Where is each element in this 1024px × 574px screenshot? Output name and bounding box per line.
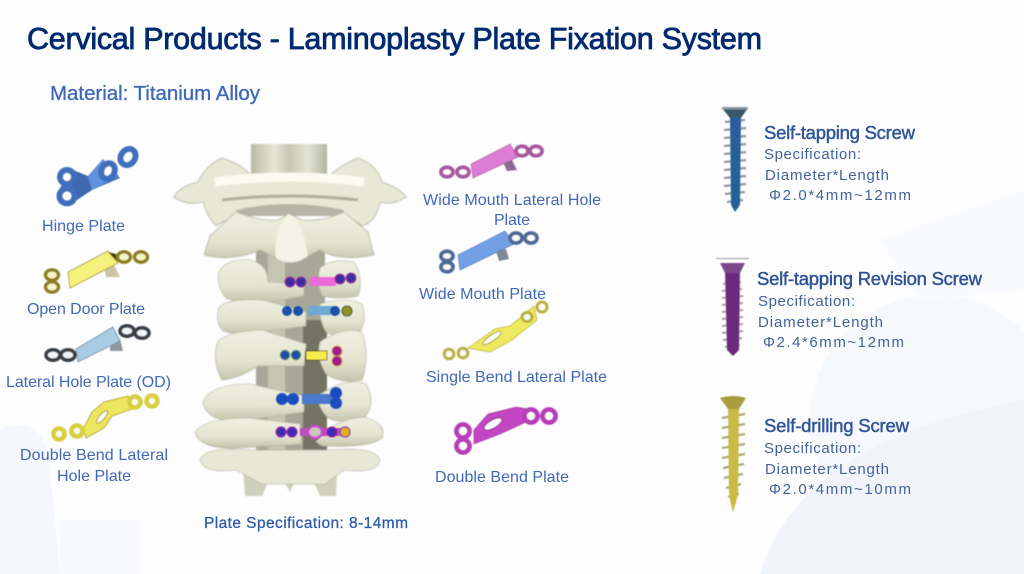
implanted yellow plate	[280, 346, 342, 366]
text: self-tapping screw	[764, 122, 916, 204]
material heading: Material: Titanium Alloy	[50, 82, 261, 105]
self-tapping revision screw item	[716, 258, 983, 356]
axis vertebra	[204, 212, 374, 262]
text: self-drilling screw: Specification:	[764, 440, 861, 457]
title: Cervical Products - Laminoplasty Plate Fixation System	[27, 22, 762, 56]
icon: wide mouth plate	[441, 231, 537, 272]
double bend lateral hole plate item	[20, 396, 168, 485]
text: self-tapping screw: Self-tapping Screw	[764, 122, 916, 143]
single bend lateral plate item	[426, 302, 607, 386]
implanted magenta plate	[276, 426, 350, 438]
implanted blue plate	[276, 387, 342, 409]
text: self-tapping revision screw: Diameter*Length	[758, 314, 883, 331]
icon: open door plate	[46, 251, 148, 292]
label: hinge plate: Hinge Plate	[42, 218, 125, 235]
text: self-tapping revision screw	[757, 268, 983, 351]
label: double bend lateral hole plate: Double Bend Lateral	[20, 447, 168, 464]
double bend plate item	[435, 407, 569, 486]
open door plate item	[27, 251, 148, 318]
implanted light blue plate	[282, 306, 352, 316]
implanted plates	[276, 273, 356, 438]
label: wide mouth lateral hole plate: Wide Mouth Lateral Hole	[423, 192, 601, 209]
icon: double bend plate	[456, 407, 556, 452]
text: self-tapping revision screw: Self-tapping Revision Screw	[757, 268, 983, 289]
text: self-drilling screw: Φ2.0*4mm~10mm	[769, 481, 911, 498]
implanted pink plate	[285, 273, 356, 287]
label: wide mouth lateral hole plate: Plate	[494, 212, 530, 229]
icon: hinge plate	[60, 146, 139, 204]
icon: lateral hole plate	[46, 326, 149, 362]
label: single bend lateral plate: Single Bend Lateral Plate	[426, 369, 607, 386]
icon: single bend lateral plate	[444, 302, 547, 359]
hinge plate item	[42, 146, 139, 235]
text: self-drilling screw: Self-drilling Screw	[764, 415, 910, 436]
text: self-drilling screw	[764, 415, 911, 498]
label: wide mouth lateral hole plate	[423, 192, 601, 229]
icon: blue screw	[722, 107, 748, 212]
text: self-drilling screw: Diameter*Length	[765, 461, 889, 478]
label: double bend lateral hole plate: Hole Plate	[57, 468, 131, 485]
text: self-tapping revision screw: Specification:	[758, 293, 855, 310]
label: open door plate: Open Door Plate	[27, 301, 145, 318]
plate specification caption: Plate Specification: 8-14mm	[204, 515, 408, 532]
icon: purple screw	[716, 258, 749, 356]
text: self-tapping revision screw: Φ2.4*6mm~12mm	[763, 334, 904, 351]
text: self-tapping screw: Specification:	[764, 146, 861, 163]
label: double bend lateral hole plate	[20, 447, 168, 485]
lateral hole plate item	[6, 326, 171, 391]
bottom legs	[243, 470, 337, 496]
cervical vertebrae	[218, 260, 304, 302]
label: lateral hole plate: Lateral Hole Plate (OD)	[6, 374, 171, 391]
icon: double bend lateral hole plate	[54, 396, 158, 440]
wide mouth lateral hole plate item	[423, 144, 601, 229]
label: double bend plate: Double Bend Plate	[435, 469, 569, 486]
spine illustration	[174, 144, 406, 496]
wide mouth plate item	[419, 231, 546, 303]
lower canal	[256, 240, 325, 470]
atlas vertebra	[174, 158, 406, 226]
text: self-tapping screw: Φ2.0*4mm~12mm	[769, 187, 911, 204]
self-tapping screw item	[722, 107, 916, 212]
label: wide mouth plate: Wide Mouth Plate	[419, 286, 546, 303]
spinal column	[251, 144, 327, 194]
icon: gold screw	[720, 396, 746, 513]
text: self-tapping screw: Diameter*Length	[765, 167, 889, 184]
icon: wide mouth lateral hole plate	[441, 144, 542, 178]
self-drilling screw item	[720, 396, 911, 513]
